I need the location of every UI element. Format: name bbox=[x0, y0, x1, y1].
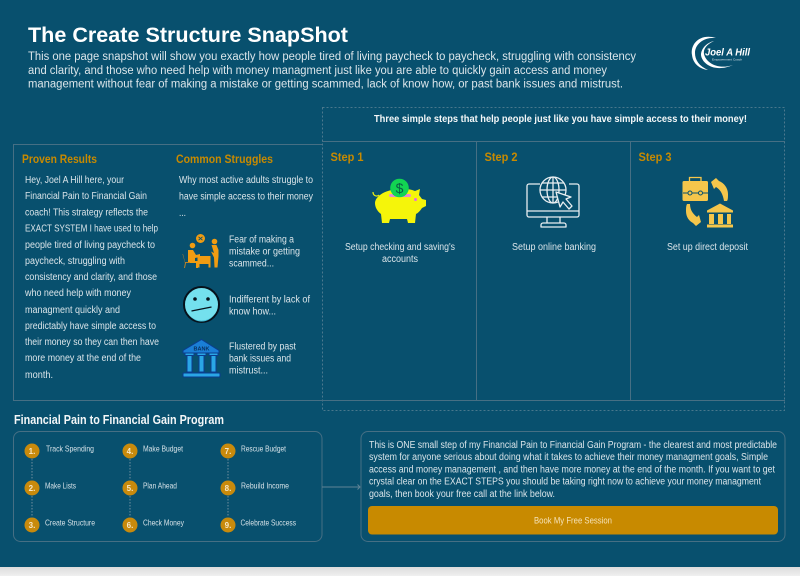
struggle text: fear bbox=[229, 234, 300, 270]
icon: bank bbox=[183, 340, 220, 377]
panel: step 3 bbox=[638, 152, 748, 253]
step labels: Plan Ahead bbox=[143, 482, 177, 490]
icon: neutral face bbox=[184, 287, 219, 322]
step labels: Rebuild Income bbox=[241, 482, 289, 490]
common struggles intro: have simple access to their money bbox=[179, 192, 313, 202]
icon: globe monitor bbox=[527, 177, 579, 227]
common struggles intro: Why most active adults struggle to bbox=[179, 175, 313, 186]
icon: piggy bank: $ bbox=[396, 180, 404, 196]
step labels: Track Spending bbox=[46, 444, 94, 454]
proven results body: month. bbox=[25, 370, 53, 381]
panel: proven results bbox=[22, 154, 159, 381]
proven results body: Financial Pain to Financial Gain bbox=[25, 191, 147, 202]
call to action text: goals, then book your free call at the link below. bbox=[369, 489, 555, 500]
title: The Create Structure SnapShot bbox=[28, 23, 348, 47]
step 2 heading: Step 2 bbox=[484, 152, 518, 164]
step labels bbox=[45, 444, 296, 528]
step labels: Check Money bbox=[143, 518, 185, 528]
step 1 caption: Setup checking and saving's bbox=[345, 242, 455, 253]
panel outline bbox=[14, 142, 785, 400]
step labels: Make Budget bbox=[143, 444, 184, 454]
step 3 heading: Step 3 bbox=[638, 152, 672, 164]
steps dashed frame bbox=[322, 108, 784, 410]
button bbox=[368, 506, 778, 534]
struggle text: fear: scammed... bbox=[229, 258, 274, 270]
intro text: and clarity, and those who need help with money managment just like you are able to quickly gain access and money bbox=[28, 65, 607, 77]
struggle text: flustered: mistrust... bbox=[229, 366, 268, 376]
intro text: management without fear of making a mistake or getting scammed, lack of know how, or past bank issues and mistrust. bbox=[28, 78, 623, 90]
step 3 caption: Set up direct deposit bbox=[667, 242, 748, 253]
icon: briefcase and bank exchange bbox=[682, 178, 733, 228]
icon: bank: BANK bbox=[194, 346, 209, 352]
struggle text: indifferent: Indifferent by lack of bbox=[229, 294, 310, 306]
proven results body: Hey, Joel A Hill here, your bbox=[25, 175, 125, 186]
proven results body: who need help with money bbox=[24, 288, 131, 299]
button: Book My Free Session bbox=[534, 516, 612, 526]
badge numbers: 7. bbox=[225, 447, 231, 456]
call to action text bbox=[369, 440, 777, 500]
bottom strip bbox=[0, 567, 800, 576]
proven results body: paycheck, struggling with bbox=[25, 256, 125, 267]
badge numbers: 3. bbox=[29, 521, 35, 530]
panel: program steps bbox=[14, 432, 322, 542]
struggle text: flustered bbox=[229, 342, 296, 376]
step labels: Make Lists bbox=[45, 482, 76, 490]
badge numbers: 9. bbox=[225, 521, 231, 530]
step labels: Celebrate Success bbox=[240, 518, 296, 528]
proven results body: managment quickly and bbox=[25, 305, 120, 316]
struggle text: indifferent: know how... bbox=[229, 306, 276, 318]
struggle text: indifferent bbox=[229, 294, 310, 318]
logo: Joel A Hill bbox=[705, 48, 750, 58]
step labels: Create Structure bbox=[45, 518, 95, 528]
proven results body: more money at the end of the bbox=[25, 353, 141, 364]
badge numbers bbox=[29, 447, 231, 530]
struggle text: flustered: Flustered by past bbox=[229, 342, 296, 352]
step labels: Rescue Budget bbox=[241, 444, 287, 454]
badge numbers: 1. bbox=[29, 447, 35, 456]
intro text bbox=[28, 51, 636, 90]
intro text: This one page snapshot will show you exactly how people tired of living paycheck to paycheck, struggling with consistency bbox=[28, 51, 636, 63]
badge numbers: 2. bbox=[29, 484, 35, 493]
panel: common struggles bbox=[176, 154, 313, 377]
panel: step 1 bbox=[330, 152, 455, 265]
badge numbers: 6. bbox=[127, 521, 133, 530]
struggle text: fear: mistake or getting bbox=[229, 246, 300, 258]
proven results body: predictably have simple access to bbox=[25, 321, 156, 332]
step 2 caption: Setup online banking bbox=[512, 242, 596, 253]
icon: people at desk bbox=[182, 234, 218, 268]
common struggles intro: ... bbox=[179, 208, 186, 219]
struggle text: flustered: bank issues and bbox=[229, 354, 291, 364]
proven results body: coach! This strategy reflects the bbox=[25, 208, 148, 218]
logo: Empowerment Coach bbox=[712, 58, 742, 62]
proven results body bbox=[24, 175, 159, 381]
common struggles intro bbox=[179, 175, 313, 219]
step 1 caption bbox=[345, 242, 455, 265]
proven results body: people tired of living paycheck to bbox=[25, 240, 155, 251]
step 1 heading: Step 1 bbox=[330, 152, 364, 164]
program heading: Financial Pain to Financial Gain Program bbox=[14, 413, 224, 427]
badge numbers: 8. bbox=[225, 484, 231, 493]
badge numbers: 4. bbox=[127, 447, 133, 456]
struggle text: fear: Fear of making a bbox=[229, 234, 294, 246]
panel: step 2 bbox=[484, 152, 596, 253]
step badges bbox=[24, 444, 236, 532]
steps headline: Three simple steps that help people just like you have simple access to their money! bbox=[374, 113, 747, 125]
proven results body: their money so they can then have bbox=[25, 337, 159, 348]
step 1 caption: accounts bbox=[382, 254, 418, 265]
badge numbers: 5. bbox=[127, 484, 133, 493]
proven results body: consistency and clarity, and those bbox=[25, 272, 157, 283]
arrow bbox=[322, 484, 360, 490]
heading: common struggles: Common Struggles bbox=[176, 154, 273, 166]
proven results body: EXACT SYSTEM I have used to help bbox=[25, 224, 158, 234]
panel: call to action bbox=[361, 432, 785, 542]
heading: proven results: Proven Results bbox=[22, 154, 97, 166]
logo bbox=[692, 37, 750, 70]
